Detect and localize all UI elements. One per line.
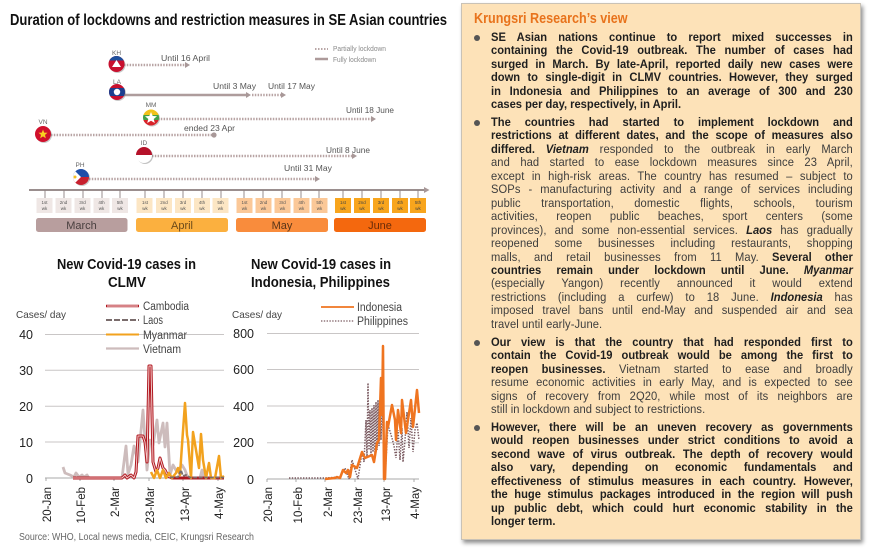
month block: May: wk	[261, 206, 267, 211]
month block: April	[136, 198, 228, 232]
row: Myanmar: Until 18 June	[346, 106, 395, 115]
paragraph 3: resume economic activities in early May, and is expected to see	[491, 375, 853, 389]
chart title: CLMV	[57, 257, 196, 291]
x axis labels: 2-Mar	[323, 487, 335, 517]
paragraph 3: reopen businesses. Vietnam started to ease and broadly	[491, 362, 853, 376]
bullet marker 1	[474, 35, 480, 41]
left column: timeline and charts	[10, 12, 447, 543]
paragraph 4: up public debt, which could hurt economic stability in the	[491, 501, 853, 515]
row: Cambodia: KH	[112, 50, 121, 57]
month block: March	[36, 198, 128, 232]
legend: CLMV: Cambodia	[143, 301, 190, 313]
chart title: Indonesia, Philippines: Indonesia, Philippines	[251, 275, 390, 291]
month block: April: wk	[180, 206, 186, 211]
month block: May: wk	[317, 206, 323, 211]
paragraph 3	[491, 335, 853, 416]
row: Philippines	[72, 162, 332, 186]
legend: CLMV: Vietnam	[143, 344, 181, 356]
paragraph 2: The countries had started to implement lockdown and	[491, 115, 853, 129]
paragraph 4: second wave of virus outbreak. The depth of recovery would	[491, 447, 853, 461]
x axis labels: 2-Mar	[110, 487, 122, 517]
month block: May: 2nd	[260, 200, 268, 205]
month block: June: June	[368, 220, 392, 232]
x axis labels: 13-Apr	[180, 487, 192, 522]
month block: March: 3rd	[79, 200, 86, 205]
x axis labels: 23-Mar	[353, 487, 365, 523]
month block: May	[236, 198, 328, 232]
month block: April: 3rd	[180, 200, 187, 205]
row: Laos: LA	[113, 79, 122, 86]
month block: March: wk	[42, 206, 48, 211]
series: Vietnam	[63, 410, 224, 478]
paragraph 4	[491, 420, 853, 528]
month block: June: 3rd	[378, 200, 385, 205]
row: Vietnam: VN	[38, 119, 48, 126]
bullet marker 3	[474, 340, 480, 346]
row: Myanmar	[142, 102, 395, 126]
paragraph 2	[491, 115, 854, 331]
paragraph 2: provinces), and some non-essential services. Laos has gradually	[491, 223, 853, 237]
y axis labels: 400	[233, 400, 254, 414]
y axis labels	[19, 328, 33, 486]
row: Laos	[108, 79, 315, 101]
y axis labels: 800	[233, 327, 254, 341]
chart: Indonesia and Philippines new cases	[232, 257, 422, 523]
month block: June: 2nd	[358, 200, 366, 205]
row: Laos: Until 3 May	[213, 82, 256, 91]
bullet marker 4	[474, 425, 480, 431]
x axis labels: 23-Mar	[145, 487, 157, 523]
month block: April: 1st	[142, 200, 149, 205]
legend: CLMV: Laos	[143, 315, 163, 327]
y axis labels	[233, 327, 254, 487]
paragraph 1	[491, 30, 853, 111]
series: Philippines	[289, 383, 419, 479]
y axis title: Cases/ day	[232, 309, 283, 321]
paragraph 2: travel until early-June.	[491, 317, 602, 331]
chart: CLMV new cases	[16, 257, 226, 523]
paragraph 4: the huge stimulus packages introduced in the region will push	[491, 487, 853, 501]
month block: June: wk	[378, 206, 384, 211]
month block: March: 1st	[41, 200, 48, 205]
x axis labels: 4-May	[214, 487, 226, 519]
paragraph 4: effectiveness of stimulus measures in each country. However,	[491, 474, 853, 488]
paragraph 2: and had started to ease lockdown measures since 23 April,	[491, 155, 853, 169]
month block: June: 1st	[340, 200, 347, 205]
paragraph 3: signs of recovery from 2Q20, while most of its neighbors are	[491, 389, 853, 403]
y axis labels: 30	[19, 364, 33, 378]
paragraph 1: down to single-digit in CLMV countries. However, they surged	[491, 70, 853, 84]
paragraph 2: (especially Yangon) recently announced it would extend	[491, 276, 853, 290]
legend: CLMV: Myanmar	[143, 330, 187, 342]
month block: March: wk	[99, 206, 105, 211]
y axis labels: 20	[19, 400, 33, 414]
paragraph 2: restrictions (including a curfew) to 18 June. Indonesia has	[491, 290, 853, 304]
month block: April: 5th	[217, 200, 224, 205]
month block: April: 4th	[199, 200, 206, 205]
x axis labels	[42, 487, 226, 523]
x axis labels: 4-May	[410, 487, 422, 519]
x axis labels: 20-Jan	[263, 487, 275, 522]
month block: April: wk	[199, 206, 205, 211]
month block: June: 4th	[397, 200, 404, 205]
chart title: Indonesia, Philippines	[251, 257, 391, 291]
month block: March: 2nd	[60, 200, 68, 205]
row: Laos: Until 17 May	[268, 82, 315, 91]
month block: April: 2nd	[160, 200, 168, 205]
y axis title: Cases/ day	[16, 309, 67, 321]
series: Indonesia	[325, 346, 419, 479]
paragraph 2: differed. Vietnam responded to the outbreak in early March	[491, 142, 853, 156]
legend: Indonesia, Philippines: Indonesia	[357, 302, 403, 314]
month block: April: wk	[142, 206, 148, 211]
legend: lockdown types: Fully lockdown	[333, 57, 376, 64]
x axis labels: 10-Feb	[293, 487, 305, 523]
legend: CLMV	[106, 301, 190, 356]
row: Philippines: PH	[75, 162, 85, 169]
month block: March: March	[66, 220, 97, 232]
paragraph 2: imposed travel bans until end-May and suspended air and sea	[491, 303, 853, 317]
paragraph 4: would reopen businesses under strict conditions to avoid a	[491, 433, 853, 447]
paragraph 2: activities, reopen public beaches, sport centers (some	[491, 209, 853, 223]
panel: Krungsri Research's view	[461, 3, 861, 540]
panel heading: Krungsri Research’s view	[474, 10, 628, 27]
month block: June: wk	[359, 206, 365, 211]
row: Vietnam: ended 23 Apr	[184, 124, 235, 133]
row: Indonesia: Until 8 June	[326, 146, 371, 155]
month block: May: 5th	[316, 200, 323, 205]
month block: March: wk	[80, 206, 86, 211]
paragraph 2: reopened some businesses including restaurants, shopping	[491, 236, 853, 250]
y axis labels: 600	[233, 363, 254, 377]
month block: May: wk	[242, 206, 248, 211]
legend: Indonesia, Philippines: Philippines	[357, 316, 408, 328]
paragraph 1: in Indonesia and Philippines to an average of 300 and 230	[491, 84, 853, 98]
paragraph 3: contain the Covid-19 outbreak would be among the first to	[491, 348, 853, 362]
paragraph 4: also vary, depending on economic fundamentals and	[491, 460, 853, 474]
x axis labels: 13-Apr	[381, 487, 393, 522]
row: Cambodia: Until 16 April	[161, 54, 210, 63]
paragraph 3: Our view is that the country that had responded first to	[491, 335, 853, 349]
month block: June: wk	[340, 206, 346, 211]
paragraph 4: However, there will be an uneven recovery as governments	[491, 420, 853, 434]
paragraph 1: surged in March. By late-April, reported daily new cases were	[491, 57, 853, 71]
y axis labels: 10	[19, 436, 33, 450]
timeline	[29, 50, 430, 232]
gridlines	[45, 334, 224, 442]
x axis labels	[263, 487, 422, 523]
paragraph 4: longer term.	[491, 514, 555, 528]
month block: June: wk	[397, 206, 403, 211]
paragraph 2: malls, and retail businesses from 11 May. Several other	[491, 250, 853, 264]
row: Philippines: Until 31 May	[284, 164, 332, 173]
series: Cambodia	[73, 366, 224, 478]
row: Cambodia	[108, 50, 210, 73]
bullet marker 2	[474, 120, 480, 126]
month block: March: 5th	[117, 200, 124, 205]
paragraph 1: containing the Covid-19 outbreak. The number of cases had	[491, 43, 853, 57]
chart title: Indonesia, Philippines: New Covid-19 cases in	[251, 257, 391, 273]
legend: lockdown types	[315, 46, 386, 64]
legend: lockdown types: Partially lockdown	[333, 46, 386, 53]
row: Indonesia	[135, 140, 371, 164]
paragraph 1: cases per day, respectively, in April.	[491, 97, 681, 111]
month block: March: 4th	[98, 200, 105, 205]
month block: May: May	[272, 220, 293, 232]
row: Indonesia: ID	[141, 140, 148, 147]
paragraph 2: public transportation, domestic flights, schools, tourism	[491, 196, 853, 210]
paragraph 2: countries remain under lockdown until June. Myanmar	[491, 263, 853, 277]
row: Vietnam	[35, 119, 235, 143]
paragraph 2: except in high-risk areas. The country has resumed – subject to	[491, 169, 853, 183]
month block: May: wk	[280, 206, 286, 211]
series: Laos	[170, 470, 224, 478]
month block: March: wk	[61, 206, 67, 211]
gridlines	[267, 334, 419, 443]
paragraph 3: still in lockdown and subject to restrictions.	[491, 402, 705, 416]
month block: May: 1st	[241, 200, 248, 205]
month block: April: wk	[161, 206, 167, 211]
x axis labels: 10-Feb	[76, 487, 88, 523]
y axis labels: 0	[26, 472, 33, 486]
month block: March: wk	[117, 206, 123, 211]
month block: May: wk	[299, 206, 305, 211]
chart title: CLMV: New Covid-19 cases in	[57, 257, 196, 273]
month block: June: wk	[415, 206, 421, 211]
month block: June: 5th	[415, 200, 422, 205]
paragraph 2: SOPs - manufacturing activity and a range of services including	[491, 182, 853, 196]
x axis labels: 20-Jan	[42, 487, 54, 522]
y axis labels: 0	[247, 473, 254, 487]
paragraph 2: restrictions at different dates, and the scope of measures also	[491, 128, 853, 142]
timeline axis	[29, 187, 430, 198]
y axis labels: 40	[19, 328, 33, 342]
month block: June	[334, 198, 426, 232]
series: Myanmar	[151, 403, 224, 478]
month block: May: 4th	[298, 200, 305, 205]
month block: April: April	[171, 220, 193, 232]
month block: April: wk	[218, 206, 224, 211]
chart title: CLMV: CLMV	[108, 275, 146, 291]
row: Myanmar: MM	[146, 102, 156, 109]
month block: May: 3rd	[279, 200, 286, 205]
legend: Indonesia, Philippines	[321, 302, 408, 328]
y axis labels: 200	[233, 436, 254, 450]
paragraph 1: SE Asian nations continue to report mixed successes in	[491, 30, 853, 44]
source note: Source: WHO, Local news media, CEIC, Krungsri Research	[19, 532, 254, 543]
